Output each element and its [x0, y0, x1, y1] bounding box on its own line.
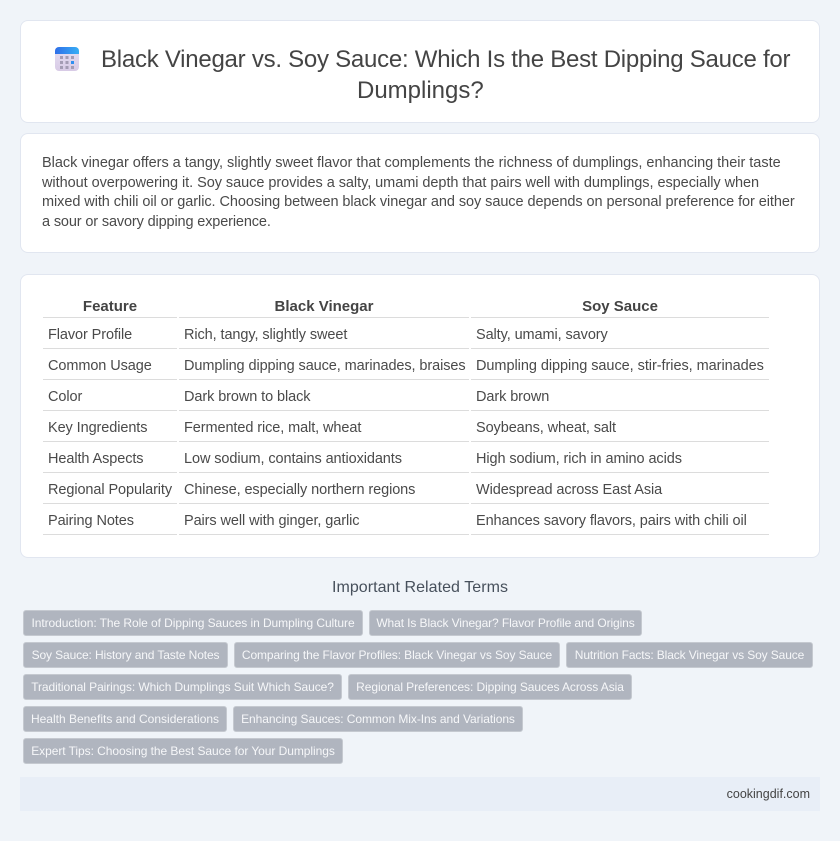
table [43, 298, 769, 535]
heading: related terms: Important Related Terms [332, 579, 508, 596]
table: Flavor Profile [48, 327, 132, 343]
related term tags: What Is Black Vinegar? Flavor Profile and Origins [376, 616, 635, 630]
table: Low sodium, contains antioxidants [184, 451, 402, 467]
table: Health Aspects [48, 451, 143, 467]
table: Salty, umami, savory [476, 327, 608, 343]
related term tags: Health Benefits and Considerations [31, 712, 219, 726]
table header: Black Vinegar [275, 298, 373, 315]
text block: summary: mixed with chili oil or garlic. Choosing between black vinegar and soy sauce depends on personal preference for either [42, 194, 795, 210]
text block: summary: a sour or savory dipping experience. [42, 214, 271, 230]
table: High sodium, rich in amino acids [476, 451, 682, 467]
related term tags: Expert Tips: Choosing the Best Sauce for Your Dumplings [31, 744, 335, 758]
related term tags: Nutrition Facts: Black Vinegar vs Soy Sauce [575, 648, 804, 662]
table: Enhances savory flavors, pairs with chili oil [476, 513, 747, 529]
table header: Feature [83, 298, 137, 315]
related term tags: Soy Sauce: History and Taste Notes [32, 648, 219, 662]
title: Dumplings? [357, 77, 484, 104]
table: Pairs well with ginger, garlic [184, 513, 359, 529]
text block: summary: without overpowering it. Soy sauce provides a salty, umami depth that pairs well with dumplings, especially when [42, 174, 759, 190]
table: Key Ingredients [48, 420, 147, 436]
related term tags: Regional Preferences: Dipping Sauces Across Asia [356, 680, 624, 694]
table: Dumpling dipping sauce, stir-fries, marinades [476, 358, 764, 374]
table: Pairing Notes [48, 513, 134, 529]
table: Regional Popularity [48, 482, 172, 498]
title: Black Vinegar vs. Soy Sauce: Which Is the Best Dipping Sauce for [101, 46, 790, 73]
table: Color [48, 389, 82, 405]
text block: summary: Black vinegar offers a tangy, slightly sweet flavor that complements the richness of dumplings, enhancing their taste [42, 155, 781, 171]
table: Widespread across East Asia [476, 482, 662, 498]
icon: calendar [55, 47, 79, 71]
table: Fermented rice, malt, wheat [184, 420, 361, 436]
related term tags: Introduction: The Role of Dipping Sauces in Dumpling Culture [31, 616, 355, 630]
panel: header [20, 20, 820, 123]
table: Rich, tangy, slightly sweet [184, 327, 347, 343]
table: Chinese, especially northern regions [184, 482, 415, 498]
table: Soybeans, wheat, salt [476, 420, 616, 436]
related term tags: Enhancing Sauces: Common Mix-Ins and Variations [241, 712, 515, 726]
table header [83, 298, 658, 315]
table: Dumpling dipping sauce, marinades, braises [184, 358, 466, 374]
related term tags [23, 610, 813, 764]
footer [20, 777, 820, 811]
panel: comparison table [20, 274, 820, 558]
table: Dark brown to black [184, 389, 310, 405]
related term tags: Comparing the Flavor Profiles: Black Vinegar vs Soy Sauce [242, 648, 552, 662]
table: Dark brown [476, 389, 549, 405]
text block: summary [42, 155, 795, 230]
table: Common Usage [48, 358, 152, 374]
panel: summary text [20, 133, 820, 253]
title [101, 46, 790, 104]
related term tags: Traditional Pairings: Which Dumplings Suit Which Sauce? [31, 680, 334, 694]
footer: site name: cookingdif.com [727, 787, 810, 801]
table header: Soy Sauce [582, 298, 658, 315]
